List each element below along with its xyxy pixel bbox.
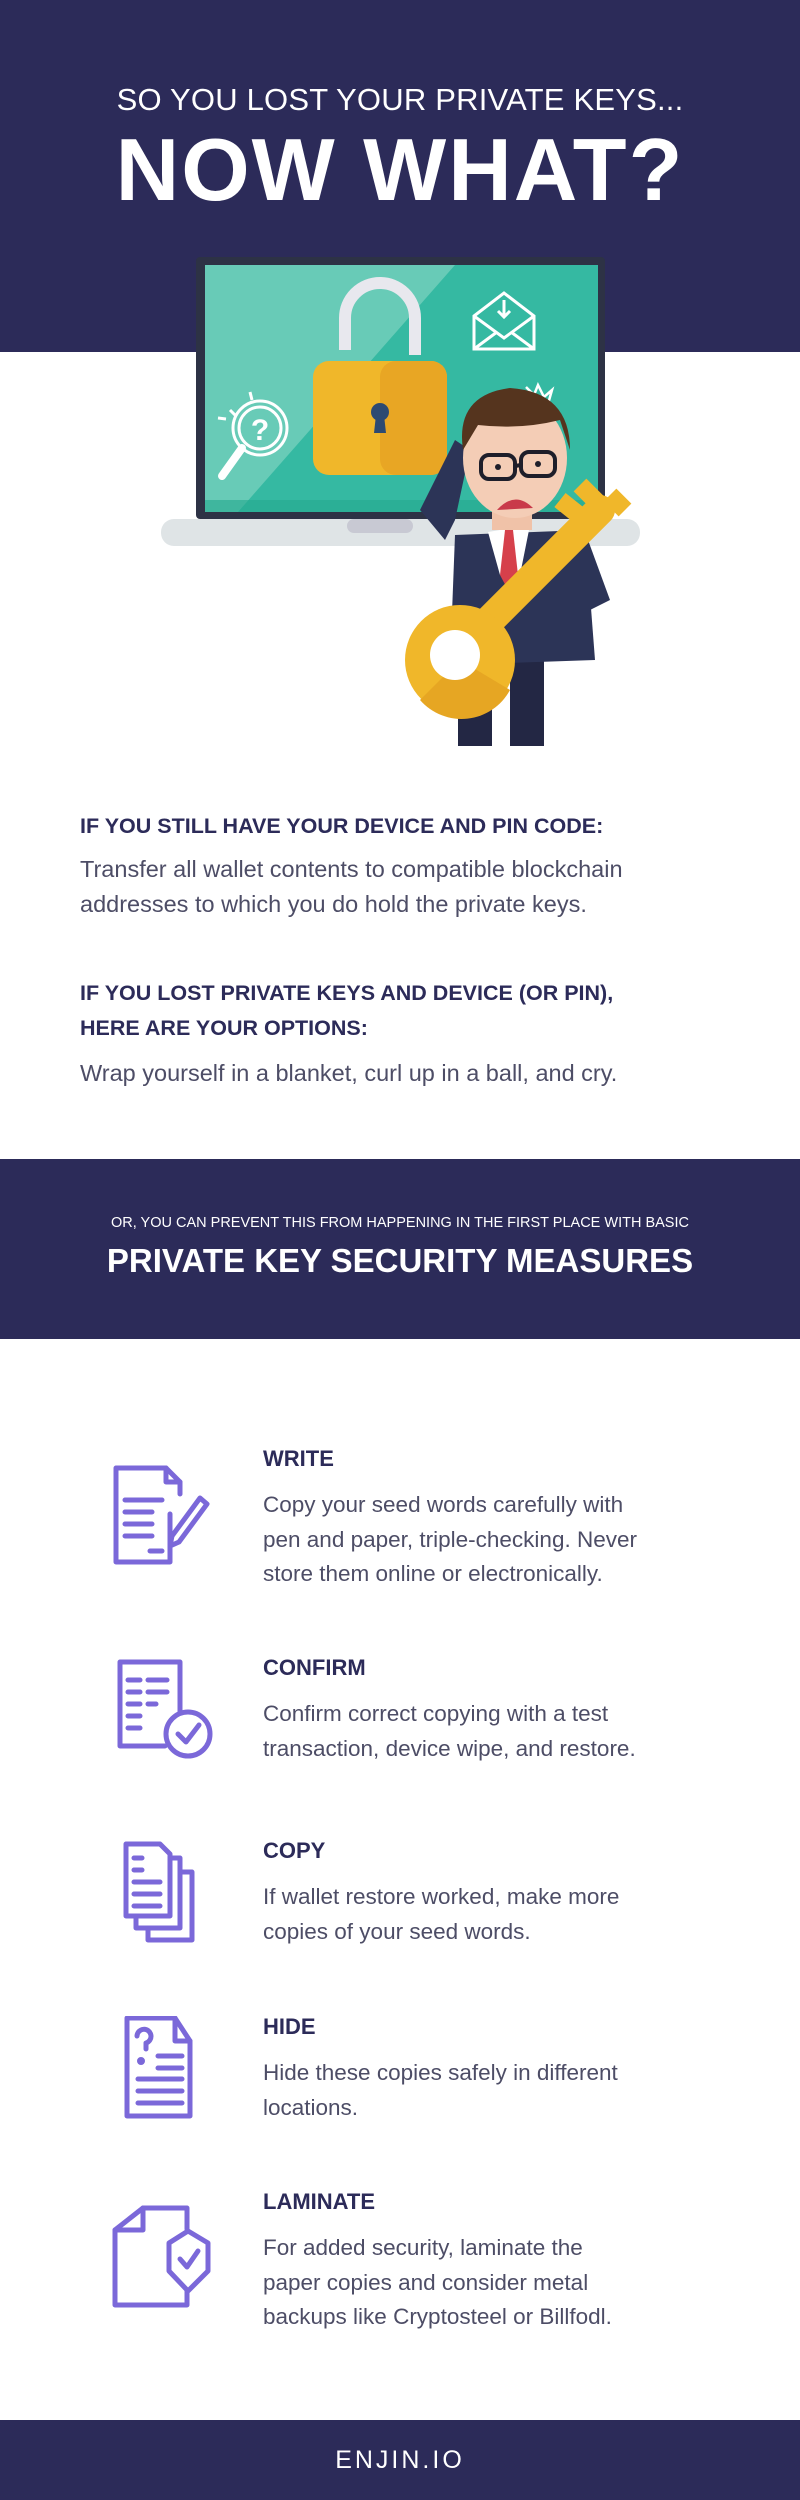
icon: magnifier question: ? bbox=[251, 414, 269, 447]
item: laminate bbox=[112, 2189, 612, 2329]
icon: zap mark bbox=[526, 385, 556, 410]
band: security measures: OR, YOU CAN PREVENT THIS FROM HAPPENING IN THE FIRST PLACE WITH BASIC bbox=[111, 1215, 689, 1231]
item: hide: locations. bbox=[263, 2094, 358, 2120]
footer bbox=[0, 2420, 800, 2500]
title: NOW WHAT? bbox=[116, 120, 684, 219]
item: write bbox=[114, 1446, 637, 1586]
key bbox=[405, 485, 625, 719]
text: transfer: addresses to which you do hold the private keys. bbox=[80, 891, 587, 917]
header band bbox=[0, 0, 800, 352]
icon: padlock bbox=[313, 283, 447, 475]
item: copy: copies of your seed words. bbox=[263, 1918, 531, 1944]
item: write: WRITE bbox=[263, 1446, 334, 1471]
item: laminate: backups like Cryptosteel or Billfodl. bbox=[263, 2304, 612, 2329]
man bbox=[420, 388, 610, 746]
item: hide bbox=[124, 2014, 618, 2120]
heading: lost keys bbox=[80, 981, 613, 1040]
item: copy bbox=[124, 1838, 619, 1944]
item: laminate: paper copies and consider metal bbox=[263, 2270, 588, 2294]
icon: magnifier question bbox=[218, 392, 287, 476]
item: hide: HIDE bbox=[263, 2014, 316, 2039]
illustration: laptop with worried man holding key bbox=[161, 257, 640, 746]
title: SO YOU LOST YOUR PRIVATE KEYS... bbox=[117, 82, 683, 117]
heading: lost keys: IF YOU LOST PRIVATE KEYS AND DEVICE (OR PIN), bbox=[80, 981, 613, 1005]
item: confirm: Confirm correct copying with a test bbox=[263, 1701, 608, 1726]
item: confirm: transaction, device wipe, and restore. bbox=[263, 1736, 636, 1760]
item: hide: Hide these copies safely in different bbox=[263, 2060, 618, 2085]
text: cry: Wrap yourself in a blanket, curl up in a ball, and cry. bbox=[80, 1060, 617, 1086]
item: write: Copy your seed words carefully with bbox=[263, 1492, 623, 1517]
text: transfer: Transfer all wallet contents to compatible blockchain bbox=[80, 856, 623, 882]
icon: copy bbox=[124, 1842, 194, 1942]
footer: ENJIN.IO bbox=[335, 2446, 465, 2474]
item: copy: If wallet restore worked, make more bbox=[263, 1884, 619, 1909]
band: security measures bbox=[0, 1159, 800, 1339]
item: laminate: For added security, laminate the bbox=[263, 2235, 583, 2260]
laptop bbox=[161, 257, 640, 546]
item: write: pen and paper, triple-checking. Never bbox=[263, 1526, 637, 1552]
heading: still have device: IF YOU STILL HAVE YOUR DEVICE AND PIN CODE: bbox=[80, 814, 603, 838]
icon: envelope bbox=[474, 293, 534, 349]
item: write: store them online or electronically. bbox=[263, 1561, 603, 1586]
item: copy: COPY bbox=[263, 1838, 325, 1863]
item: confirm bbox=[118, 1655, 636, 1760]
item: laminate: LAMINATE bbox=[263, 2189, 375, 2214]
icon: hide bbox=[124, 2016, 192, 2118]
icon: write bbox=[114, 1466, 210, 1564]
text: transfer bbox=[80, 856, 623, 917]
icon: laminate bbox=[112, 2206, 210, 2308]
heading: lost keys: HERE ARE YOUR OPTIONS: bbox=[80, 1016, 368, 1040]
icon: confirm bbox=[118, 1660, 212, 1758]
band: security measures: PRIVATE KEY SECURITY MEASURES bbox=[107, 1242, 693, 1279]
item: confirm: CONFIRM bbox=[263, 1655, 366, 1680]
